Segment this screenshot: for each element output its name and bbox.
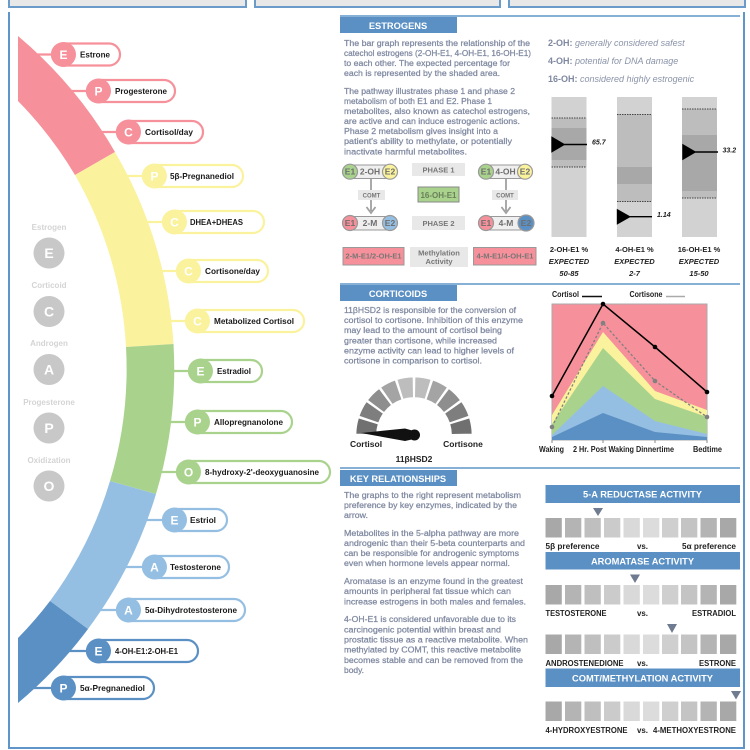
text: corticoids description: 11βHSD2 is responsible for the conversion of	[344, 305, 517, 315]
hormone legend	[23, 223, 75, 502]
text: key relationships description: methylated by COMT, this reactive metabolite	[344, 644, 521, 654]
text: estrogens description: are active and can induce estrogenic actions.	[344, 116, 520, 126]
text: hydroxy notes: 4-OH: potential for DNA damage	[548, 56, 678, 66]
bar: 2-OH-E1: EXPECTED	[549, 257, 590, 266]
text: corticoids description: greater than cortisone, while increased	[344, 336, 497, 346]
scale: 4-hydroxyestrone vs 4-methoxyestrone: 4-METHOXYESTRONE	[653, 726, 737, 735]
heading: aromatase activity	[546, 552, 740, 570]
hormone legend: E	[44, 245, 54, 261]
bar: 2-OH-E1: 50-85	[559, 269, 579, 278]
bar: 16-OH-E1: EXPECTED	[679, 257, 720, 266]
text: corticoids description: may lead to the amount of cortisol being	[344, 325, 502, 335]
pathway: methylation activity row: 2-M-E1/2-OH-E1	[346, 254, 402, 260]
pill: Cortisone/day: Cortisone/day	[205, 266, 260, 276]
heading: 5-A reductase activity: 5-A REDUCTASE ACTIVITY	[583, 490, 703, 500]
hormone legend: A	[44, 362, 54, 378]
text: hydroxy notes: 2-OH: generally considered safest	[548, 38, 685, 48]
text: hydroxy notes	[548, 38, 695, 84]
pathway: 2-OH branch: E2	[385, 218, 395, 228]
text: key relationships description	[344, 490, 528, 675]
pathway: methylation activity row: Activity	[425, 257, 453, 266]
pathway: 2-OH branch	[342, 164, 398, 230]
pill: 5-alpha-Pregnanediol	[51, 676, 154, 700]
pathway: 4-OH branch: E2	[521, 218, 531, 228]
text: hydroxy notes: 16-OH: considered highly estrogenic	[548, 74, 695, 84]
text: key relationships description: Metabolites in the 5-alpha pathway are more	[344, 528, 519, 538]
heading: COMT/methylation activity: COMT/METHYLATION ACTIVITY	[572, 674, 714, 684]
area and line chart: Waking	[539, 445, 564, 454]
pill: Allopregnanolone	[185, 410, 292, 434]
bar: 4-OH-E1: 1.14	[657, 212, 671, 219]
pill: 4-OH-E1:2-OH-E1	[86, 638, 198, 664]
pill: Estradiol	[188, 358, 262, 384]
heading: key relationships: KEY RELATIONSHIPS	[350, 474, 446, 484]
text: estrogens description: to each other. The expected percentage for	[344, 58, 510, 68]
heading: 5-A reductase activity	[546, 485, 740, 503]
gauge: 11 beta HSD2: 11βHSD2	[396, 454, 433, 464]
hormone legend: O	[44, 478, 55, 494]
pathway: phase labels	[412, 163, 465, 230]
pill: Allopregnanolone: P	[193, 416, 202, 430]
pill: 5-beta-Pregnanediol	[142, 164, 243, 188]
pill: Cortisone/day: C	[184, 264, 193, 278]
pill: 5-alpha-Dihydrotestosterone: 5α-Dihydrotestosterone	[145, 605, 237, 615]
heading: corticoids: CORTICOIDS	[369, 289, 427, 299]
pill: Cortisol/day: Cortisol/day	[145, 127, 193, 137]
heading: estrogens: ESTROGENS	[369, 21, 427, 31]
pill: 4-OH-E1:2-OH-E1: E	[94, 644, 103, 658]
text: key relationships description: 4-OH-E1 is considered unfavorable due to its	[344, 614, 516, 624]
bar: 2-OH-E1: 65.7	[592, 140, 607, 146]
pathway: 4-OH branch: 4-OH	[495, 167, 516, 177]
gauge: 11 beta HSD2: Cortisol	[350, 439, 382, 449]
pill: Estrone: E	[59, 48, 68, 62]
text: key relationships description: carcinogenic potential within breast and	[344, 624, 501, 634]
pathway: 2-OH branch: E2	[385, 167, 395, 177]
pill: Cortisol/day: C	[124, 126, 133, 140]
pathway: 4-OH branch: E1	[481, 218, 491, 228]
text: corticoids description	[344, 305, 523, 366]
pill: Metabolized Cortisol	[185, 308, 304, 334]
pill: 4-OH-E1:2-OH-E1: 4-OH-E1:2-OH-E1	[115, 646, 178, 656]
pathway: phase labels: PHASE 2	[422, 219, 455, 228]
pill: Estrone: Estrone	[80, 50, 110, 60]
text: key relationships description: can be responsible for androgenic symptoms	[344, 548, 519, 558]
pill: Cortisol/day	[116, 120, 203, 144]
pathway: 2-OH branch: E1	[345, 218, 355, 228]
text: corticoids description: cortisone in comparison to cortisol.	[344, 356, 482, 366]
pill: Estriol	[162, 508, 227, 532]
scale: 4-hydroxyestrone vs 4-methoxyestrone: vs.	[637, 726, 648, 735]
pill: Estrone	[51, 42, 120, 67]
chart legend	[552, 290, 685, 299]
pill: Progesterone: Progesterone	[115, 86, 167, 96]
scale: 4-hydroxyestrone vs 4-methoxyestrone	[546, 691, 741, 735]
pathway: phase labels: 16-OH-E1	[420, 191, 457, 200]
text: key relationships description: Aromatase is an enzyme found in the greatest	[344, 576, 524, 586]
pill: 8-hydroxy-2'-deoxyguanosine	[176, 460, 330, 484]
text: estrogens description: The bar graph represents the relationship of the	[344, 38, 530, 48]
text: estrogens description	[344, 38, 531, 156]
bar: 4-OH-E1: 2-7	[628, 269, 641, 278]
bar: 16-OH-E1	[678, 97, 736, 278]
pathway: methylation activity row: 4-M-E1/4-OH-E1	[476, 254, 534, 260]
pathway: methylation activity row	[343, 247, 536, 267]
pathway: 4-OH branch: E1	[481, 167, 491, 177]
scale: testosterone vs estradiol: ESTRADIOL	[692, 609, 736, 618]
connector lines	[31, 54, 198, 688]
pill: 5-alpha-Dihydrotestosterone: A	[124, 604, 133, 618]
heading: aromatase activity: AROMATASE ACTIVITY	[591, 556, 695, 566]
heading: corticoids	[340, 285, 457, 301]
scale: 5-beta vs 5-alpha	[546, 508, 737, 551]
scale: testosterone vs estradiol: vs.	[637, 609, 648, 618]
pill: Estriol: Estriol	[190, 515, 216, 525]
bar: 4-OH-E1: EXPECTED	[614, 257, 655, 266]
text: estrogens description: Phase 2 metabolism gives insight into a	[344, 126, 498, 136]
pathway: 4-OH branch: 4-M	[499, 218, 513, 228]
pill: 5-beta-Pregnanediol: 5β-Pregnanediol	[170, 171, 234, 181]
text: estrogens description: catechol estrogens (2-OH-E1, 4-OH-E1, 16-OH-E1)	[344, 48, 531, 58]
gauge: 11 beta HSD2	[350, 375, 483, 464]
text: estrogens description: metabolism of both E1 and E2. Phase 1	[344, 96, 492, 106]
scale: androstenedione vs estrone: vs.	[637, 659, 648, 668]
pathway: 4-OH branch	[478, 164, 534, 231]
pill: 8-hydroxy-2'-deoxyguanosine: 8-hydroxy-2'-deoxyguanosine	[205, 467, 319, 477]
hormone legend: P	[44, 420, 54, 436]
area and line chart: 2 Hr. Post Waking	[573, 445, 634, 454]
top header boxes	[9, 0, 745, 7]
bar: 16-OH-E1: 15-50	[689, 269, 709, 278]
text: key relationships description: preference by key enzymes, indicated by the	[344, 500, 517, 510]
pill: Estradiol: E	[196, 364, 205, 378]
bar: 2-OH-E1	[549, 97, 607, 278]
text: key relationships description: androgenic than their 5-beta counterparts and	[344, 538, 525, 548]
pill: Progesterone	[86, 78, 175, 104]
scale: 4-hydroxyestrone vs 4-methoxyestrone: 4-HYDROXYESTRONE	[546, 726, 628, 735]
pill: Testosterone: A	[150, 560, 159, 574]
text: key relationships description: amounts in peripheral fat tissue which can	[344, 586, 511, 596]
pathway: phase labels: PHASE 1	[422, 166, 455, 174]
pill: Testosterone	[142, 554, 229, 580]
bar: 16-OH-E1: 16-OH-E1 %	[678, 245, 721, 254]
chart legend: Cortisol	[552, 290, 579, 299]
scale: 5-beta vs 5-alpha: 5α preference	[682, 542, 737, 551]
hormone legend: Oxidization	[27, 456, 71, 465]
text: key relationships description: prostatic tissue as a reactive metabolite. When	[344, 634, 528, 644]
area and line chart	[539, 302, 723, 454]
text: estrogens description: patient's ability to methylate, or potentially	[344, 136, 513, 146]
pill: DHEA+DHEAS: DHEA+DHEAS	[190, 217, 243, 227]
pathway: 2-OH branch: 2-OH	[360, 167, 380, 177]
text: key relationships description: increase estrogens in both males and females.	[344, 596, 526, 606]
pill: Metabolized Cortisol: C	[193, 314, 202, 328]
hormone legend: Corticoid	[31, 281, 67, 290]
scale: 5-beta vs 5-alpha: vs.	[637, 542, 648, 551]
pathway: methylation activity row: Methylation	[418, 248, 460, 258]
pathway: 2-OH branch: COMT	[363, 194, 381, 200]
text: key relationships description: The graphs to the right represent metabolism	[344, 490, 521, 500]
pill: 5-alpha-Pregnanediol: 5α-Pregnanediol	[80, 683, 145, 693]
text: key relationships description: body.	[344, 665, 364, 675]
bar: 4-OH-E1: 4-OH-E1 %	[615, 245, 654, 254]
hormone legend: Progesterone	[23, 398, 75, 407]
pathway: 2-OH branch: 2-M	[363, 218, 377, 228]
pill: 8-hydroxy-2'-deoxyguanosine: O	[184, 466, 193, 480]
heading: key relationships	[340, 470, 457, 486]
pill: Estradiol: Estradiol	[217, 366, 251, 376]
pill: DHEA+DHEAS	[162, 210, 264, 234]
text: estrogens description: The pathway illustrates phase 1 and phase 2	[344, 86, 515, 96]
text: corticoids description: cortisol to cortisone. Inhibition of this enzyme	[344, 315, 523, 325]
heading: COMT/methylation activity	[546, 668, 740, 687]
pill: 5-beta-Pregnanediol: P	[150, 170, 159, 184]
heading: estrogens	[340, 17, 457, 33]
text: corticoids description: enzyme activity can lead to higher levels of	[344, 346, 515, 356]
scale: androstenedione vs estrone: ANDROSTENEDIONE	[546, 659, 624, 668]
pathway: 4-OH branch: COMT	[496, 194, 514, 200]
scale: testosterone vs estradiol: TESTOSTERONE	[546, 609, 607, 618]
pathway: 4-OH branch: E2	[520, 167, 530, 177]
pill: Estriol: E	[170, 514, 179, 528]
area and line chart: Bedtime	[693, 445, 723, 454]
pill: Metabolized Cortisol: Metabolized Cortisol	[214, 316, 294, 326]
pill: 5-alpha-Pregnanediol: P	[59, 682, 68, 696]
text: key relationships description: arrow.	[344, 510, 368, 520]
pill: 5-alpha-Dihydrotestosterone	[116, 598, 245, 622]
hormone legend: Estrogen	[32, 223, 66, 232]
bar: 16-OH-E1: 33.2	[722, 148, 736, 154]
pill: Progesterone: P	[94, 84, 103, 98]
hormone legend: Androgen	[30, 339, 68, 348]
pill: Cortisone/day	[176, 258, 268, 284]
text: estrogens description: metabolites, also known as catechol estrogens,	[344, 106, 530, 116]
hormone legend: C	[44, 304, 54, 320]
text: key relationships description: even when hormone levels appear normal.	[344, 558, 510, 568]
bar: 2-OH-E1: 2-OH-E1 %	[550, 245, 589, 254]
pill: Testosterone: Testosterone	[170, 562, 221, 572]
chart legend: Cortisone	[630, 290, 663, 299]
gauge: 11 beta HSD2: Cortisone	[443, 439, 483, 449]
bar: 4-OH-E1	[614, 97, 671, 278]
scale: testosterone vs estradiol	[546, 574, 736, 618]
scale: androstenedione vs estrone	[546, 624, 737, 668]
pill: DHEA+DHEAS: C	[170, 216, 179, 230]
scale: 5-beta vs 5-alpha: 5β preference	[546, 542, 600, 551]
area and line chart: Dinnertime	[636, 445, 674, 454]
scale: androstenedione vs estrone: ESTRONE	[699, 659, 737, 668]
pathway: 2-OH branch: E1	[345, 167, 355, 177]
pill: Allopregnanolone: Allopregnanolone	[214, 417, 283, 427]
text: estrogens description: each is represented by the shaded area.	[344, 68, 500, 78]
text: key relationships description: becomes stable and can be removed from the	[344, 655, 523, 665]
arc: colour-coded spectrum	[18, 36, 174, 703]
text: estrogens description: inactivate harmful metabolites.	[344, 146, 467, 156]
